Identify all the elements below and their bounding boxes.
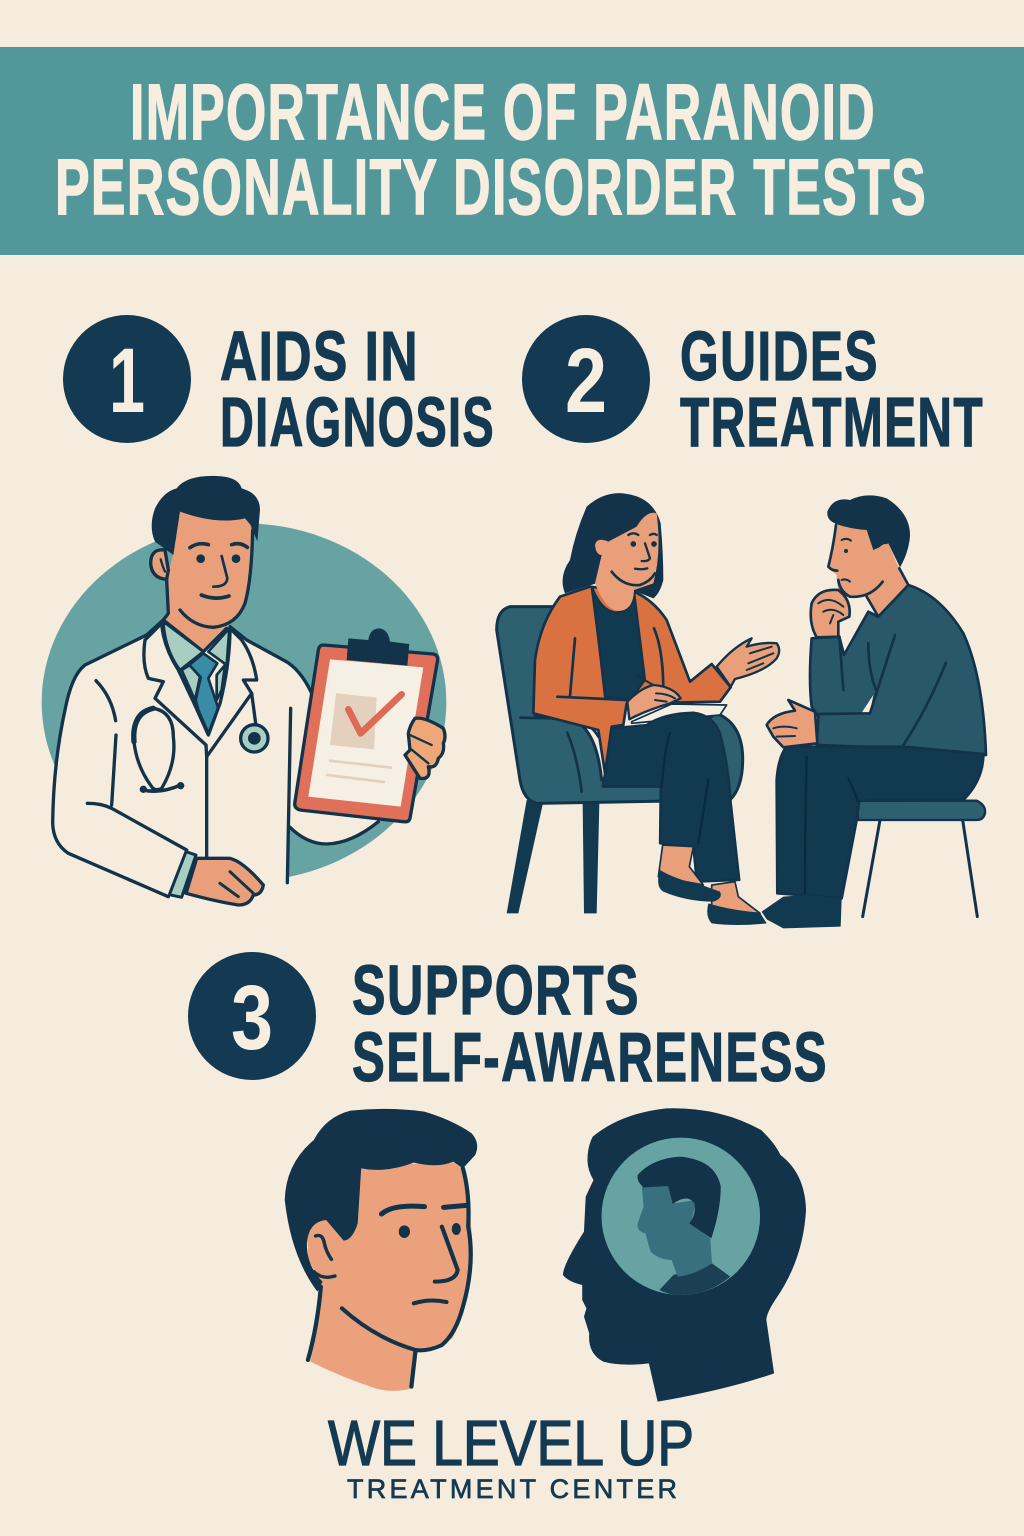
facial features <box>161 544 247 598</box>
shirt collar and tie <box>163 622 229 700</box>
client resting hand <box>767 700 817 747</box>
client shoes <box>762 895 842 928</box>
clipboard <box>295 628 438 822</box>
illustration: therapist and client conversation <box>497 493 986 928</box>
armchair <box>497 607 743 913</box>
hand on clipboard <box>405 718 445 779</box>
section 2 heading: GUIDES <box>680 317 879 395</box>
inner figure <box>638 1157 730 1295</box>
logo: WE LEVEL UP <box>328 1407 694 1479</box>
ear detail <box>314 1235 335 1277</box>
section 2 heading: 2 <box>565 330 607 432</box>
nose and mouth <box>435 1227 458 1282</box>
therapist writing hand and pen <box>627 685 681 719</box>
document lines <box>327 761 391 782</box>
client trousers <box>777 747 983 898</box>
eyes <box>399 1225 410 1238</box>
therapist hair <box>563 493 663 598</box>
section 1 heading: DIAGNOSIS <box>220 383 495 461</box>
title text <box>55 67 927 231</box>
teal circle backdrop <box>42 523 446 881</box>
notepad <box>632 704 727 723</box>
doctor's lower hand <box>186 858 263 905</box>
hair <box>152 476 260 555</box>
therapist top <box>592 587 645 700</box>
client hair <box>827 495 910 567</box>
therapist cardigan <box>533 587 731 773</box>
section 1 heading <box>63 315 495 461</box>
illustration: worried man's face <box>285 1109 477 1391</box>
coat lapels <box>144 623 257 757</box>
therapist legs and shoes <box>658 845 760 913</box>
section 2 heading <box>522 315 984 461</box>
title banner <box>0 47 1024 255</box>
therapist gesturing hand <box>717 638 779 687</box>
therapist neck and face <box>595 513 659 611</box>
illustration: doctor holding clipboard <box>42 476 446 905</box>
client neck and face <box>828 523 908 617</box>
therapist trousers <box>603 713 739 882</box>
logo: TREATMENT CENTER <box>347 1474 677 1504</box>
head silhouette <box>563 1108 806 1402</box>
logo <box>328 1407 694 1504</box>
eyebrows <box>382 1205 466 1214</box>
coat cuff <box>169 852 196 897</box>
checkbox and check mark <box>330 693 377 749</box>
neck and face skin <box>307 1162 473 1391</box>
client sweater <box>810 585 986 755</box>
section 1 heading: 1 <box>109 330 145 432</box>
ear <box>151 550 168 579</box>
section 3 heading: SELF-AWARENESS <box>352 1018 828 1096</box>
client ear and features <box>878 544 889 566</box>
client hand on chin <box>811 590 850 637</box>
section 3 heading <box>188 951 828 1096</box>
section 3 heading: SUPPORTS <box>352 951 640 1029</box>
client chair <box>857 801 985 917</box>
stethoscope <box>134 693 268 793</box>
section 3 heading: 3 <box>231 967 273 1069</box>
neck and face <box>165 512 253 653</box>
hair <box>285 1109 477 1292</box>
face outline and jaw <box>308 1168 471 1387</box>
clipboard clip <box>347 628 409 666</box>
illustration: head silhouette with inner self <box>563 1108 806 1402</box>
teal thought circle <box>602 1138 760 1295</box>
sweater gap and fold lines <box>862 695 873 713</box>
section 1 heading: AIDS IN <box>220 317 419 395</box>
lab coat <box>53 618 397 905</box>
therapist features <box>628 533 657 569</box>
